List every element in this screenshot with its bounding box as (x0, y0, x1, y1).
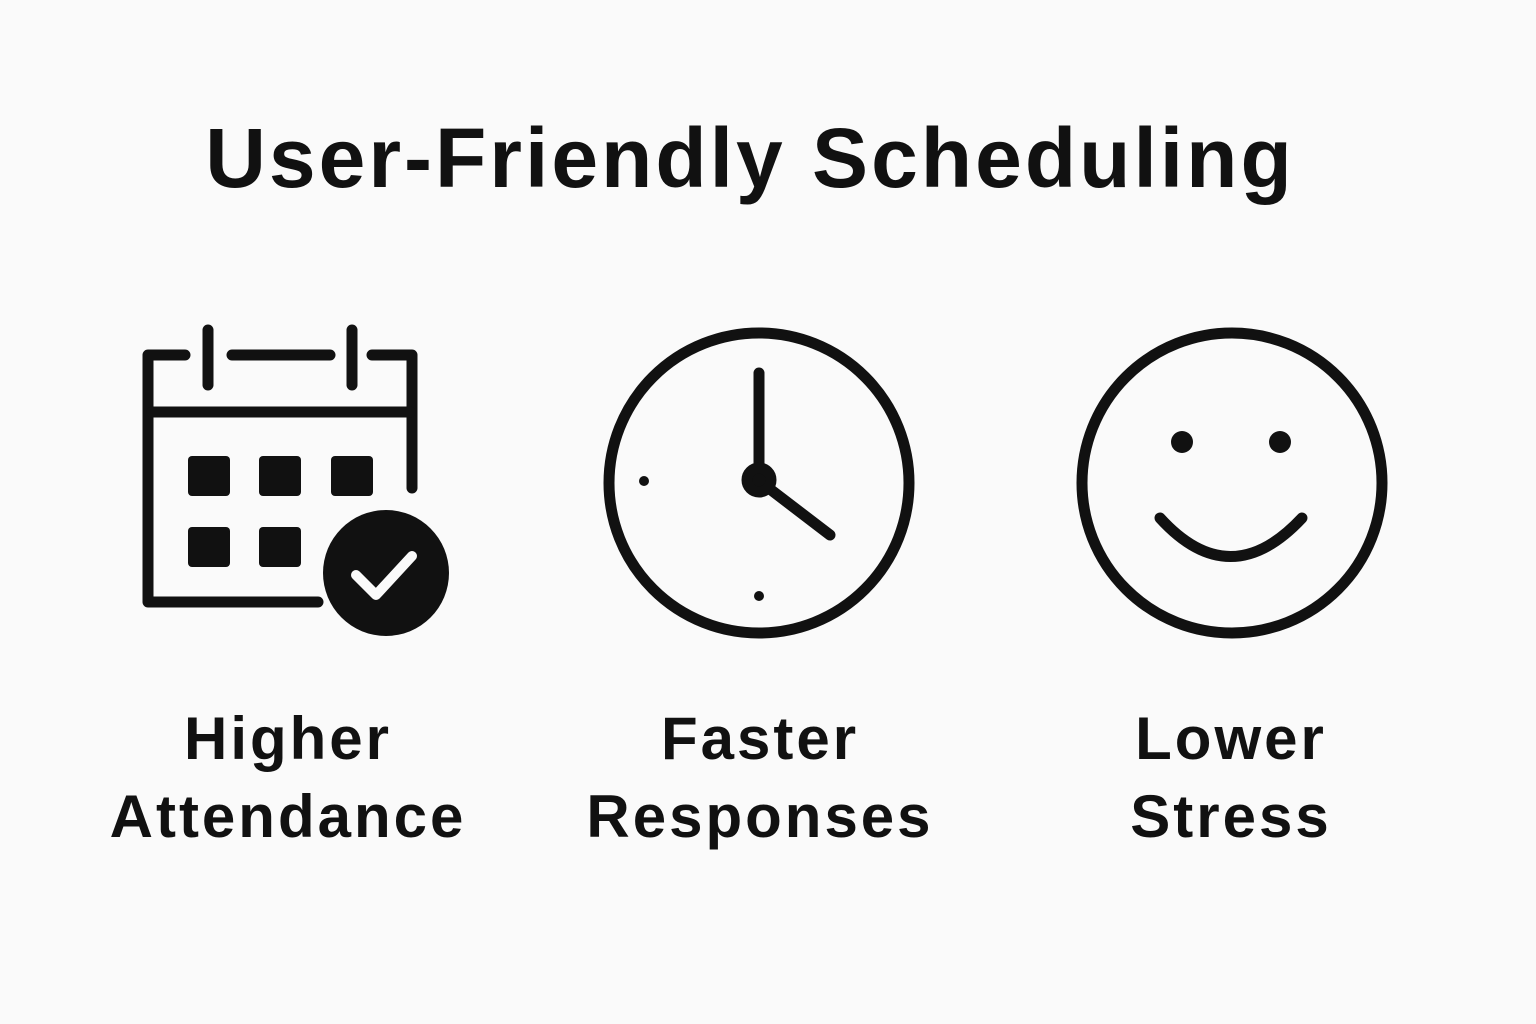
label: faster responses: Responses (586, 783, 934, 850)
label: higher attendance: Attendance (110, 783, 466, 850)
icon: smiley (1082, 333, 1382, 633)
title: User-Friendly Scheduling (205, 111, 1295, 205)
label: faster responses: Faster (661, 705, 859, 772)
label: faster responses (586, 705, 934, 850)
icon: calendar (148, 330, 449, 636)
label: lower stress: Lower (1135, 705, 1327, 772)
label: lower stress: Stress (1130, 783, 1332, 850)
label: higher attendance (110, 705, 466, 850)
label: higher attendance: Higher (184, 705, 392, 772)
label: lower stress (1130, 705, 1332, 850)
icon: clock (609, 333, 909, 633)
